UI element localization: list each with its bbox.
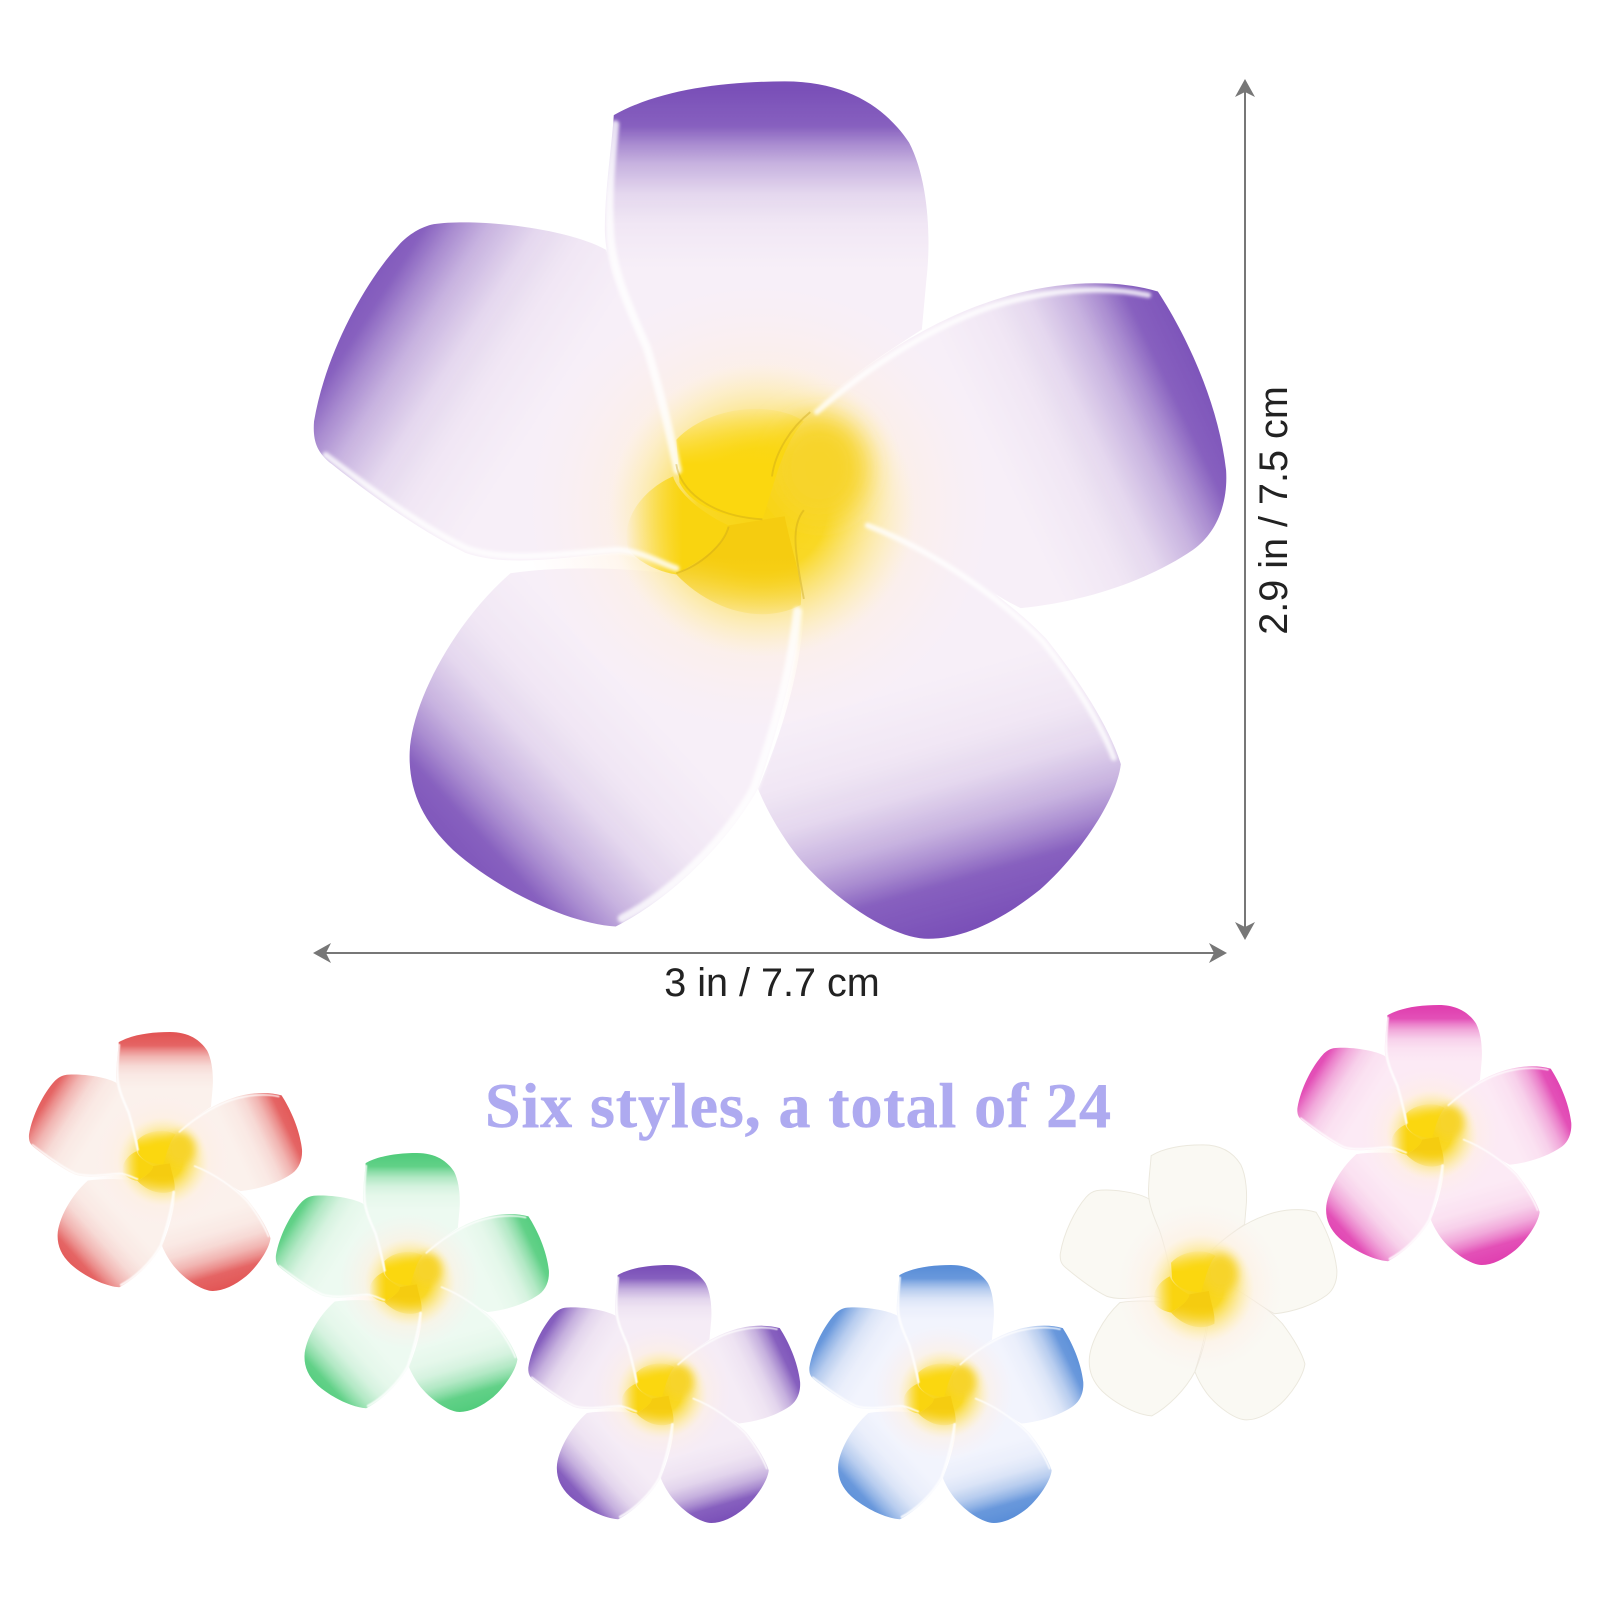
main flower: purple plumeria <box>314 81 1226 939</box>
small flower: pink <box>1297 1005 1572 1265</box>
title: Six styles, a total of 24 <box>485 1070 1112 1141</box>
height dimension arrow <box>1235 79 1255 940</box>
small flower: green <box>276 1153 549 1412</box>
small flower: purple <box>528 1265 800 1523</box>
flower centre: yellow <box>523 280 995 734</box>
small flower: blue <box>809 1265 1084 1523</box>
petals: purple tips <box>314 81 1226 939</box>
small flower: white <box>1060 1145 1337 1420</box>
petal rims <box>326 124 1148 919</box>
width label: 3 in / 7.7 cm <box>664 961 880 1005</box>
small flower: red <box>28 1032 302 1291</box>
height label: 2.9 in / 7.5 cm <box>1252 386 1296 635</box>
petals: pale base <box>314 81 1226 939</box>
centre curl lines <box>676 412 810 599</box>
width dimension arrow <box>313 943 1227 963</box>
